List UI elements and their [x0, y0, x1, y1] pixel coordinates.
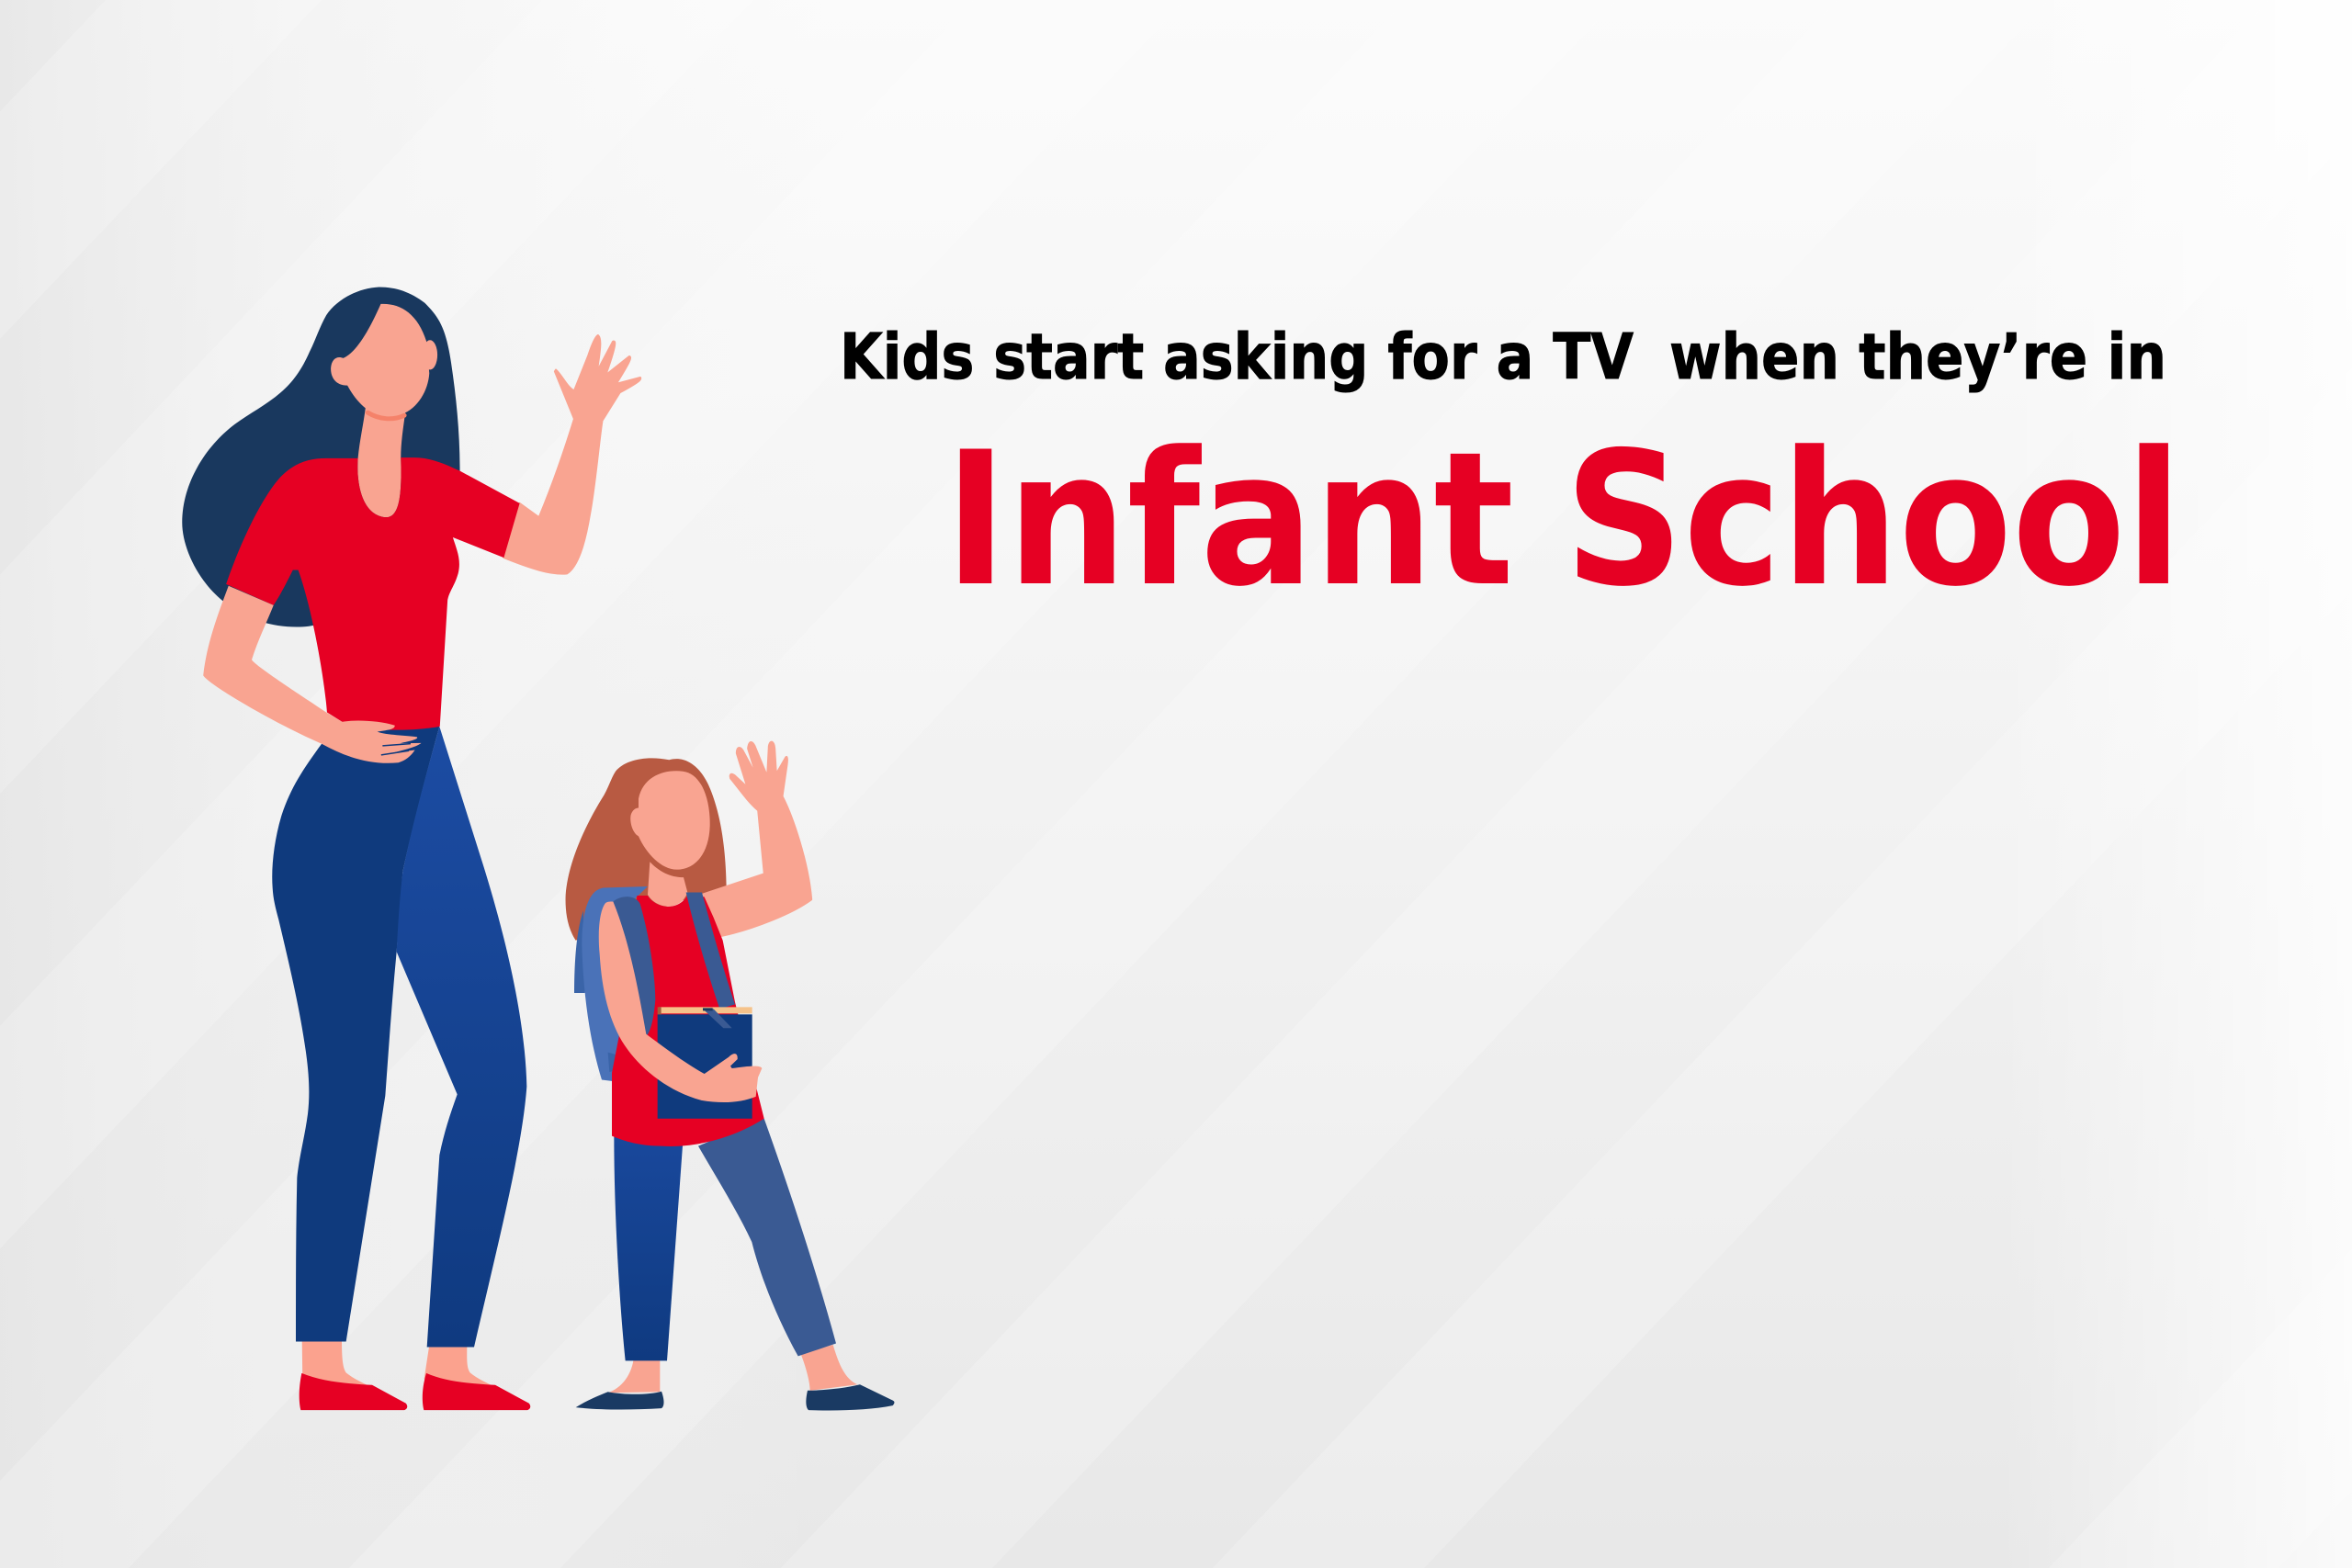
figure: mother — [182, 288, 640, 1410]
child: shirt — [612, 893, 764, 1146]
child: raised arm — [698, 742, 811, 941]
heading: kids start asking — [840, 321, 2166, 394]
heading: kids start asking: Kids start asking for a TV — [840, 321, 1634, 394]
child: backpack — [574, 886, 648, 1081]
child: backpack straps — [613, 893, 735, 1036]
figure: child with backpack and book — [566, 742, 894, 1410]
child: legs — [576, 1119, 894, 1410]
heading: infant school — [944, 412, 2182, 627]
heading: infant school: Infant — [944, 412, 1514, 627]
child: book — [658, 1007, 752, 1119]
child: hair — [566, 758, 727, 941]
mother: arm and hand on hip — [203, 586, 421, 763]
child: neck and face — [630, 771, 710, 907]
heading: infant school: School — [1565, 412, 2182, 627]
child: arm holding book — [599, 901, 762, 1102]
mother: hair, head and torso — [182, 288, 640, 763]
mother: legs and jeans — [272, 721, 530, 1410]
heading: kids start asking: when they’re in — [1669, 321, 2166, 394]
